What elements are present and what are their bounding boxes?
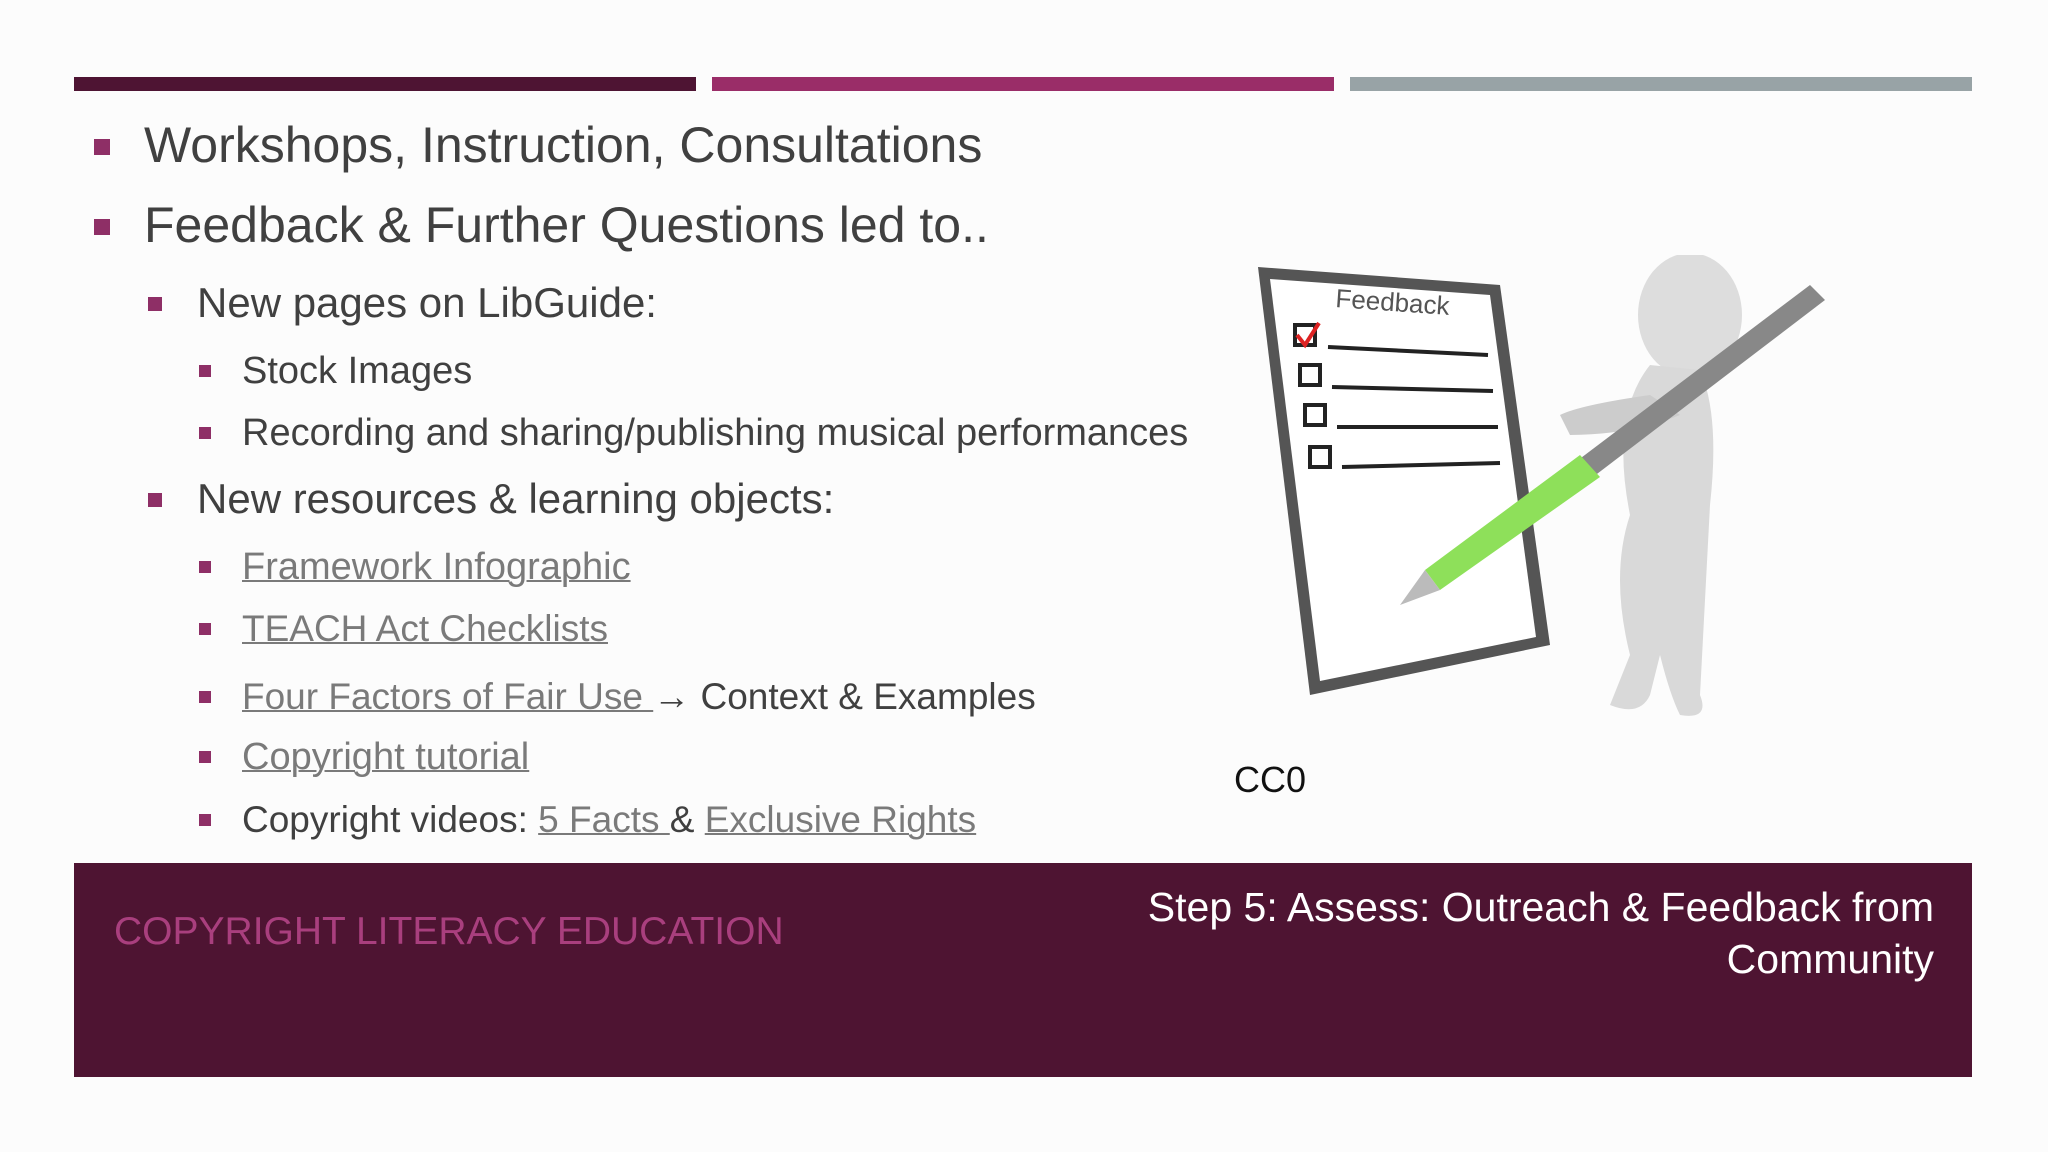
level3 item: Recording and sharing/publishing musical performances <box>242 412 1188 454</box>
footer right subtitle: Step 5: Assess: Outreach & Feedback from <box>1148 884 1934 930</box>
level3 link: Framework Infographic <box>242 546 631 588</box>
footer right subtitle: Community <box>1727 936 1934 982</box>
footer right subtitle <box>1148 884 1934 982</box>
level1 item: Workshops, Instruction, Consultations <box>144 117 982 173</box>
level3 link: Copyright tutorial <box>242 736 529 778</box>
illustration: feedback clipboard figure <box>1258 255 1825 716</box>
illustration: feedback clipboard figure: Feedback <box>1335 283 1452 321</box>
level3 link: TEACH Act Checklists <box>242 608 608 649</box>
footer left title: COPYRIGHT LITERACY EDUCATION <box>114 910 784 953</box>
footer panel <box>74 863 1972 1077</box>
top bar: gray <box>1350 77 1972 91</box>
bullet list <box>94 117 1188 840</box>
level2 item: New resources & learning objects: <box>197 475 834 522</box>
level3 item: Stock Images <box>242 350 472 392</box>
level3 link: Four Factors of Fair Use → Context & Examples <box>242 676 1036 717</box>
level1 item: Feedback & Further Questions led to.. <box>144 197 989 253</box>
level3 item: Copyright videos: 5 Facts & Exclusive Rights <box>242 799 976 840</box>
top bar: dark <box>74 77 696 91</box>
CC0 caption: CC0 <box>1234 759 1306 800</box>
top bar: magenta <box>712 77 1334 91</box>
level2 item: New pages on LibGuide: <box>197 279 657 326</box>
